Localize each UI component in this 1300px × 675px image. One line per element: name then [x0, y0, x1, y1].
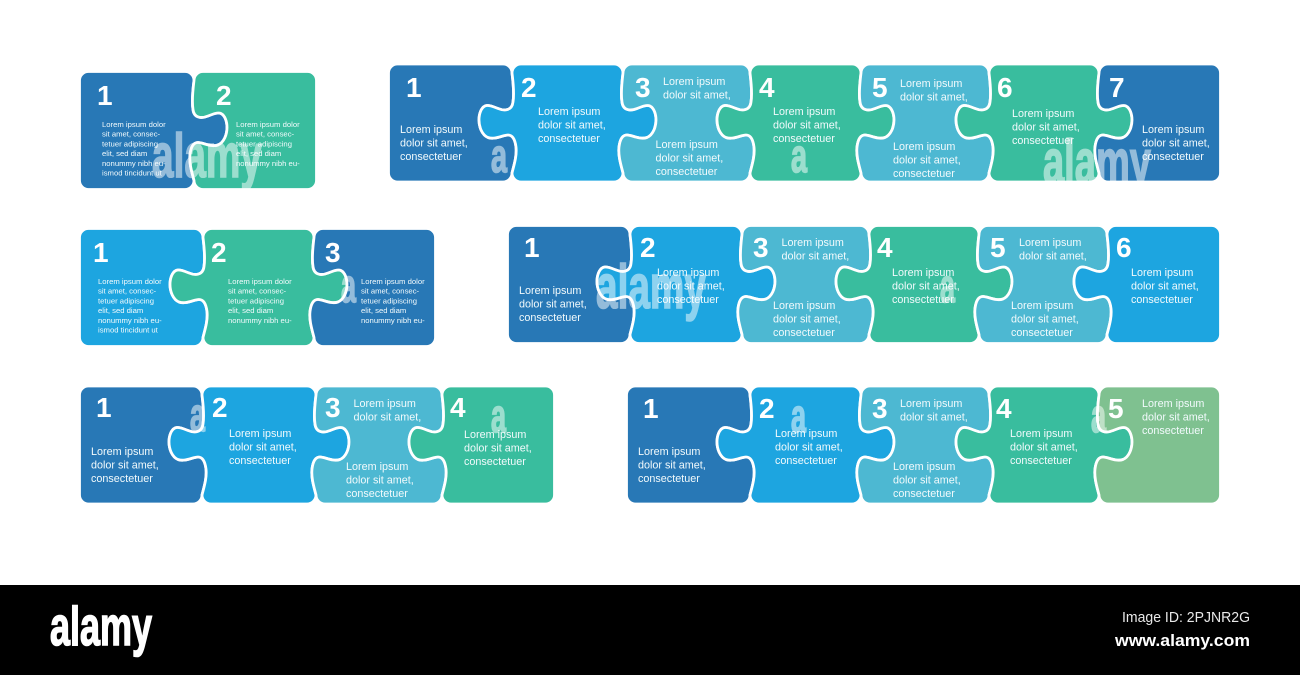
footer logo: alamy [50, 595, 152, 657]
piece 1 of 5 [626, 386, 754, 504]
piece 1 of 2: ismod tincidunt ut [102, 168, 163, 178]
piece 3 of 4: 3 [325, 392, 341, 423]
piece 6 of 6: Lorem ipsum [1131, 267, 1193, 279]
piece 2 of 6: Lorem ipsum [657, 267, 719, 279]
piece 3 of 5: 3 [872, 393, 888, 424]
piece 1 of 6: consectetuer [519, 312, 581, 324]
piece 2 of 3: nonummy nibh eu- [228, 316, 292, 325]
piece 6 of 7: consectetuer [1012, 135, 1074, 147]
piece 3 of 4: dolor sit amet, [346, 474, 414, 486]
piece 2 of 4 [169, 386, 349, 504]
piece 7 of 7 [1095, 64, 1220, 182]
piece 3 of 5: Lorem ipsum [893, 461, 955, 473]
piece 5 of 5: dolor sit amet, [1142, 412, 1210, 424]
watermarks: a [791, 129, 808, 182]
piece 2 of 6: dolor sit amet, [657, 280, 725, 292]
piece 6 of 6: 6 [1116, 232, 1132, 263]
piece 1 of 3: Lorem ipsum dolor [98, 277, 162, 286]
piece 2 of 3: tetuer adipiscing [228, 296, 284, 305]
piece 5 of 7: Lorem ipsum [893, 141, 955, 153]
piece 3 of 4: Lorem ipsum [354, 398, 416, 410]
piece 2 of 2: sit amet, consec- [236, 130, 295, 139]
piece 3 of 5 [857, 386, 993, 504]
piece 3 of 5: dolor sit amet, [893, 474, 961, 486]
panel: three-step puzzle [80, 228, 436, 346]
piece 3 of 7 [619, 64, 754, 182]
piece 1 of 3 [80, 228, 207, 346]
piece 1 of 5: dolor sit amet, [638, 460, 706, 472]
piece 3 of 3: Lorem ipsum dolor [361, 277, 425, 286]
piece 2 of 6: consectetuer [657, 294, 719, 306]
piece 1 of 2: Lorem ipsum dolor [102, 120, 166, 129]
piece 4 of 7: consectetuer [773, 133, 835, 145]
watermarks: a [940, 259, 955, 312]
piece 7 of 7: 7 [1109, 72, 1125, 103]
piece 2 of 2 [190, 72, 316, 190]
piece 5 of 6 [975, 226, 1111, 344]
piece 1 of 5: consectetuer [638, 473, 700, 485]
piece 4 of 6: consectetuer [892, 294, 954, 306]
piece 3 of 6: dolor sit amet, [773, 314, 841, 326]
piece 1 of 3: ismod tincidunt ut [98, 326, 159, 334]
piece 1 of 6: Lorem ipsum [519, 285, 581, 297]
piece 1 of 3: elit, sed diam [98, 306, 143, 315]
piece 1 of 3: sit amet, consec- [98, 287, 157, 296]
piece 3 of 6: Lorem ipsum [773, 300, 835, 312]
piece 3 of 4 [312, 386, 446, 504]
watermarks: alamy [596, 253, 706, 322]
piece 4 of 6: Lorem ipsum [892, 267, 954, 279]
piece 2 of 3: 2 [211, 237, 227, 268]
piece 5 of 5: 5 [1108, 393, 1124, 424]
piece 1 of 7: Lorem ipsum [400, 124, 462, 136]
piece 7 of 7: dolor sit amet, [1142, 138, 1210, 150]
piece 2 of 2: 2 [216, 80, 232, 111]
panel: seven-step puzzle [388, 64, 1220, 182]
piece 1 of 4 [80, 386, 206, 504]
piece 3 of 6: Lorem ipsum [782, 237, 844, 249]
piece 5 of 6: consectetuer [1011, 327, 1073, 339]
piece 2 of 3: elit, sed diam [228, 306, 273, 315]
piece 2 of 5: Lorem ipsum [775, 428, 837, 440]
piece 1 of 2: tetuer adipiscing [102, 139, 158, 148]
watermarks: a [491, 389, 506, 442]
piece 4 of 4: dolor sit amet, [464, 442, 532, 454]
piece 5 of 7: consectetuer [893, 168, 955, 180]
piece 1 of 3: 1 [93, 237, 109, 268]
piece 5 of 5: consectetuer [1142, 425, 1204, 437]
panel: five-step puzzle [626, 386, 1220, 504]
piece 6 of 6: consectetuer [1131, 294, 1193, 306]
panel: six-step puzzle [508, 226, 1220, 344]
piece 6 of 7 [956, 64, 1132, 182]
watermarks [152, 122, 1151, 442]
piece 2 of 4: Lorem ipsum [229, 428, 291, 440]
piece 6 of 7: dolor sit amet, [1012, 122, 1080, 134]
piece 1 of 7: consectetuer [400, 151, 462, 163]
piece 4 of 5: consectetuer [1010, 455, 1072, 467]
piece 5 of 5: Lorem ipsum [1142, 398, 1204, 410]
footer bar [0, 585, 1300, 675]
watermarks: a [791, 389, 806, 442]
piece 4 of 5 [956, 386, 1132, 504]
piece 3 of 3: nonummy nibh eu- [361, 316, 425, 325]
piece 2 of 4: 2 [212, 392, 228, 423]
piece 1 of 7: dolor sit amet, [400, 138, 468, 150]
piece 3 of 4: consectetuer [346, 488, 408, 500]
piece 2 of 4: consectetuer [229, 455, 291, 467]
piece 6 of 7: Lorem ipsum [1012, 108, 1074, 120]
piece 2 of 2: Lorem ipsum dolor [236, 120, 300, 129]
piece 3 of 7: Lorem ipsum [656, 139, 718, 151]
piece 1 of 7: 1 [406, 72, 422, 103]
piece 5 of 7: Lorem ipsum [900, 78, 962, 90]
piece 2 of 7 [479, 64, 656, 182]
piece 3 of 3 [310, 228, 436, 346]
piece 2 of 2: nonummy nibh eu- [236, 159, 300, 168]
piece 1 of 6: 1 [524, 232, 540, 263]
piece 2 of 5: consectetuer [775, 455, 837, 467]
piece 2 of 6: 2 [640, 232, 656, 263]
piece 1 of 6: dolor sit amet, [519, 298, 587, 310]
piece 1 of 5: Lorem ipsum [638, 446, 700, 458]
piece 2 of 5: 2 [759, 393, 775, 424]
piece 6 of 6 [1074, 226, 1220, 344]
watermarks: a [190, 388, 205, 441]
piece 1 of 4: Lorem ipsum [91, 446, 153, 458]
piece 4 of 5: 4 [996, 393, 1012, 424]
piece 3 of 5: consectetuer [893, 488, 955, 500]
piece 1 of 4: dolor sit amet, [91, 460, 159, 472]
piece 1 of 6 [508, 226, 634, 344]
piece 4 of 5: dolor sit amet, [1010, 442, 1078, 454]
piece 2 of 7: dolor sit amet, [538, 120, 606, 132]
watermarks: a [341, 259, 356, 312]
piece 1 of 7 [388, 64, 516, 182]
piece 6 of 6: dolor sit amet, [1131, 280, 1199, 292]
piece 4 of 4 [409, 386, 554, 504]
piece 1 of 3: nonummy nibh eu- [98, 316, 162, 325]
piece 1 of 2: elit, sed diam [102, 149, 147, 158]
website: www.alamy.com [1114, 631, 1250, 650]
piece 3 of 6: dolor sit amet, [782, 250, 849, 262]
image id: Image ID: 2PJNR2G [1122, 609, 1250, 626]
piece 4 of 6: 4 [877, 232, 893, 263]
piece 3 of 7: dolor sit amet, [663, 90, 731, 102]
watermarks: a [491, 129, 508, 182]
piece 4 of 5: Lorem ipsum [1010, 428, 1072, 440]
piece 3 of 7: dolor sit amet, [656, 152, 723, 164]
piece 2 of 3: Lorem ipsum dolor [228, 277, 292, 286]
piece 3 of 5: dolor sit amet, [900, 412, 968, 424]
piece 1 of 2: sit amet, consec- [102, 130, 161, 139]
piece 2 of 5 [717, 386, 894, 504]
piece 2 of 2: tetuer adipiscing [236, 139, 292, 148]
piece 5 of 6: 5 [990, 232, 1006, 263]
piece 1 of 2 [80, 72, 227, 190]
piece 4 of 4: Lorem ipsum [464, 429, 526, 441]
piece 6 of 7: 6 [997, 72, 1013, 103]
piece 3 of 5: Lorem ipsum [900, 398, 962, 410]
piece 3 of 4: dolor sit amet, [354, 412, 421, 424]
watermarks: a [1091, 389, 1106, 442]
piece 2 of 7: consectetuer [538, 133, 600, 145]
piece 5 of 6: dolor sit amet, [1019, 250, 1087, 262]
piece 1 of 3: tetuer adipiscing [98, 296, 154, 305]
piece 2 of 7: Lorem ipsum [538, 106, 600, 118]
piece 2 of 6 [597, 226, 775, 344]
piece 5 of 7 [857, 64, 993, 182]
piece 4 of 7: dolor sit amet, [773, 120, 841, 132]
piece 1 of 2: nonummy nibh eu- [102, 159, 166, 168]
piece 3 of 6: 3 [753, 232, 769, 263]
piece 3 of 3: 3 [325, 237, 341, 268]
piece 3 of 6: consectetuer [773, 327, 835, 339]
piece 5 of 7: dolor sit amet, [900, 92, 968, 104]
piece 2 of 3: sit amet, consec- [228, 287, 287, 296]
piece 5 of 5 [1095, 386, 1220, 504]
piece 3 of 3: elit, sed diam [361, 306, 406, 315]
piece 5 of 6: dolor sit amet, [1011, 314, 1079, 326]
piece 3 of 7: consectetuer [656, 166, 718, 178]
panel: two-step puzzle [80, 72, 316, 190]
piece 2 of 3 [170, 228, 347, 346]
piece 7 of 7: Lorem ipsum [1142, 124, 1204, 136]
piece 3 of 7: Lorem ipsum [663, 76, 725, 88]
piece 1 of 5: 1 [643, 393, 659, 424]
piece 2 of 2: elit, sed diam [236, 149, 281, 158]
piece 3 of 7: 3 [635, 72, 651, 103]
piece 5 of 7: dolor sit amet, [893, 154, 961, 166]
piece 5 of 7: 5 [872, 72, 888, 103]
piece 4 of 7 [717, 64, 894, 182]
piece 1 of 4: consectetuer [91, 473, 153, 485]
piece 2 of 4: dolor sit amet, [229, 442, 297, 454]
piece 1 of 4: 1 [96, 392, 112, 423]
panel: four-step puzzle [80, 386, 554, 504]
piece 4 of 4: 4 [450, 392, 466, 423]
watermarks: alamy [1043, 128, 1151, 197]
piece 4 of 4: consectetuer [464, 456, 526, 468]
piece 2 of 7: 2 [521, 72, 537, 103]
piece 3 of 3: sit amet, consec- [361, 287, 420, 296]
piece 3 of 6 [738, 226, 873, 344]
piece 3 of 4: Lorem ipsum [346, 461, 408, 473]
piece 4 of 7: 4 [759, 72, 775, 103]
piece 3 of 3: tetuer adipiscing [361, 296, 417, 305]
piece 5 of 6: Lorem ipsum [1019, 237, 1081, 249]
piece 2 of 5: dolor sit amet, [775, 442, 843, 454]
piece 1 of 2: 1 [97, 80, 113, 111]
piece 7 of 7: consectetuer [1142, 151, 1204, 163]
piece 4 of 6 [836, 226, 1012, 344]
piece 4 of 6: dolor sit amet, [892, 280, 960, 292]
watermarks: alamy [152, 122, 262, 191]
piece 4 of 7: Lorem ipsum [773, 106, 835, 118]
piece 5 of 6: Lorem ipsum [1011, 300, 1073, 312]
